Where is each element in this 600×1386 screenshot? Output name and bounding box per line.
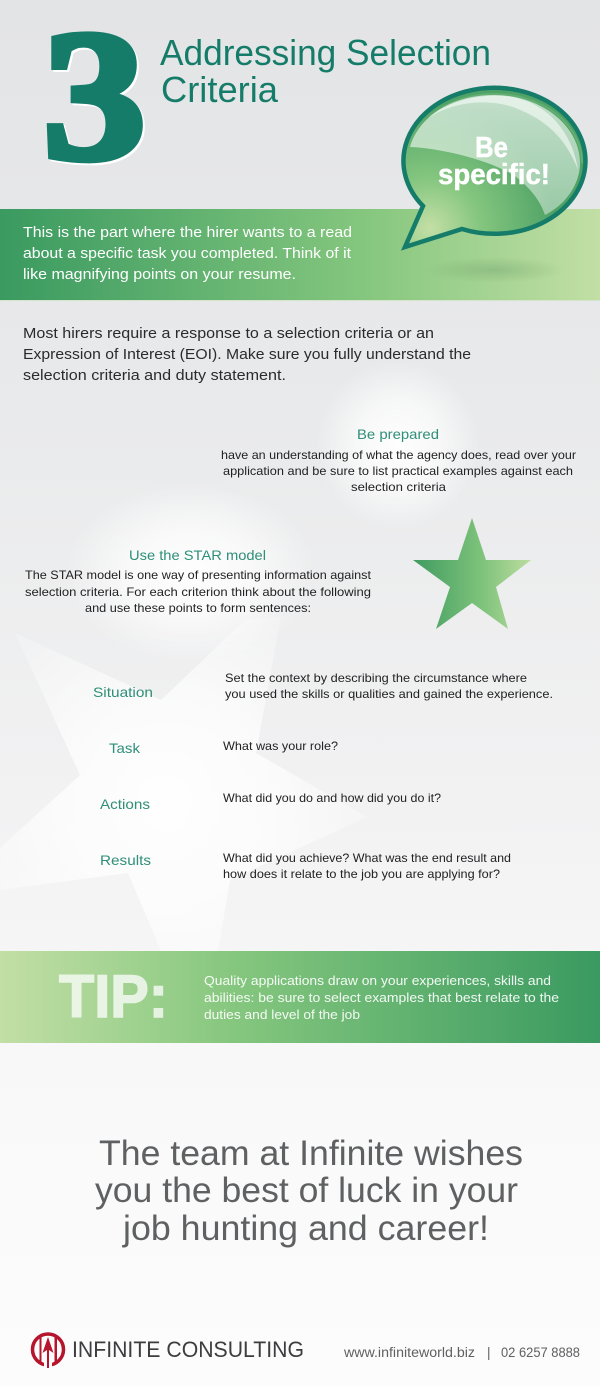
be prepared text: application and be sure to list practical examples against each bbox=[223, 464, 573, 478]
star row: task: What was your role? bbox=[223, 739, 338, 753]
footer company name: INFINITE CONSULTING bbox=[72, 1337, 304, 1362]
tip band bbox=[0, 951, 600, 1043]
footer contact details: | bbox=[487, 1345, 491, 1360]
section number 3: 3 bbox=[45, 0, 148, 201]
title bbox=[160, 32, 491, 110]
star model text: selection criteria. For each criterion think about the following bbox=[25, 585, 371, 599]
footer contact details bbox=[343, 1345, 580, 1360]
star row: task: Task bbox=[109, 740, 141, 756]
gloss highlight bbox=[410, 95, 580, 215]
star model text: and use these points to form sentences: bbox=[85, 601, 311, 615]
intro text: about a specific task you completed. Think of it bbox=[23, 245, 352, 262]
bubble text bbox=[438, 132, 550, 191]
bubble text: Be bbox=[475, 132, 508, 164]
speech bubble: be specific bbox=[403, 88, 585, 247]
tip text: Quality applications draw on your experiences, skills and bbox=[204, 974, 551, 988]
star row: task bbox=[109, 739, 338, 756]
heading: use the star model: Use the STAR model bbox=[129, 547, 266, 563]
intro text: This is the part where the hirer wants to a read bbox=[23, 224, 352, 241]
closing message: you the best of luck in your bbox=[95, 1171, 518, 1210]
intro paragraph: selection criteria and duty statement. bbox=[23, 367, 286, 384]
be prepared text bbox=[221, 448, 576, 494]
footer contact details: www.infiniteworld.biz bbox=[343, 1345, 475, 1360]
bubble shadow bbox=[425, 257, 565, 283]
star row: actions: Actions bbox=[100, 796, 150, 812]
star model text bbox=[25, 568, 372, 615]
footer contact details: 02 6257 8888 bbox=[501, 1345, 580, 1360]
intro paragraph bbox=[23, 325, 471, 384]
tip heading: TIP: bbox=[59, 963, 168, 1030]
be prepared text: have an understanding of what the agency does, read over your bbox=[221, 448, 576, 462]
star row: actions: What did you do and how did you do it? bbox=[223, 791, 441, 805]
be prepared block bbox=[221, 426, 576, 494]
star row: situation: you used the skills or qualities and gained the experience. bbox=[225, 687, 553, 701]
title: Addressing Selection bbox=[160, 32, 491, 73]
star model text: The STAR model is one way of presenting information against bbox=[25, 568, 372, 582]
large pale background star bbox=[0, 617, 367, 951]
be prepared text: selection criteria bbox=[351, 480, 446, 494]
star row: results: Results bbox=[100, 852, 151, 868]
intro text: like magnifying points on your resume. bbox=[23, 266, 296, 283]
star row: results bbox=[100, 851, 511, 881]
star row: situation bbox=[93, 671, 553, 701]
closing message: job hunting and career! bbox=[122, 1209, 489, 1248]
top rim highlight bbox=[428, 96, 578, 170]
closing message bbox=[95, 1134, 523, 1248]
star row: actions bbox=[100, 791, 441, 812]
intro paragraph: Most hirers require a response to a selection criteria or an bbox=[23, 325, 434, 342]
star row: results: What did you achieve? What was the end result and bbox=[223, 851, 511, 865]
icon: green star bbox=[413, 518, 531, 629]
tip text bbox=[204, 974, 559, 1022]
star row: results: how does it relate to the job you are applying for? bbox=[223, 867, 500, 881]
closing message: The team at Infinite wishes bbox=[99, 1134, 523, 1173]
tip text: duties and level of the job bbox=[204, 1008, 360, 1022]
glow: be prepared bbox=[316, 360, 480, 530]
intro text bbox=[23, 224, 352, 283]
heading: be prepared: Be prepared bbox=[357, 426, 439, 442]
intro paragraph: Expression of Interest (EOI). Make sure you fully understand the bbox=[23, 346, 471, 363]
footer logo mark bbox=[32, 1334, 64, 1369]
star row: situation: Situation bbox=[93, 684, 153, 700]
inner ring bbox=[407, 94, 582, 232]
star model block bbox=[25, 547, 372, 615]
bubble text: specific! bbox=[438, 159, 550, 191]
green intro band bbox=[0, 209, 600, 301]
title: Criteria bbox=[161, 69, 279, 110]
star row: situation: Set the context by describing the circumstance where bbox=[225, 671, 527, 685]
tip text: abilities: be sure to select examples that best relate to the bbox=[204, 991, 559, 1005]
glow: star model bbox=[65, 482, 315, 662]
